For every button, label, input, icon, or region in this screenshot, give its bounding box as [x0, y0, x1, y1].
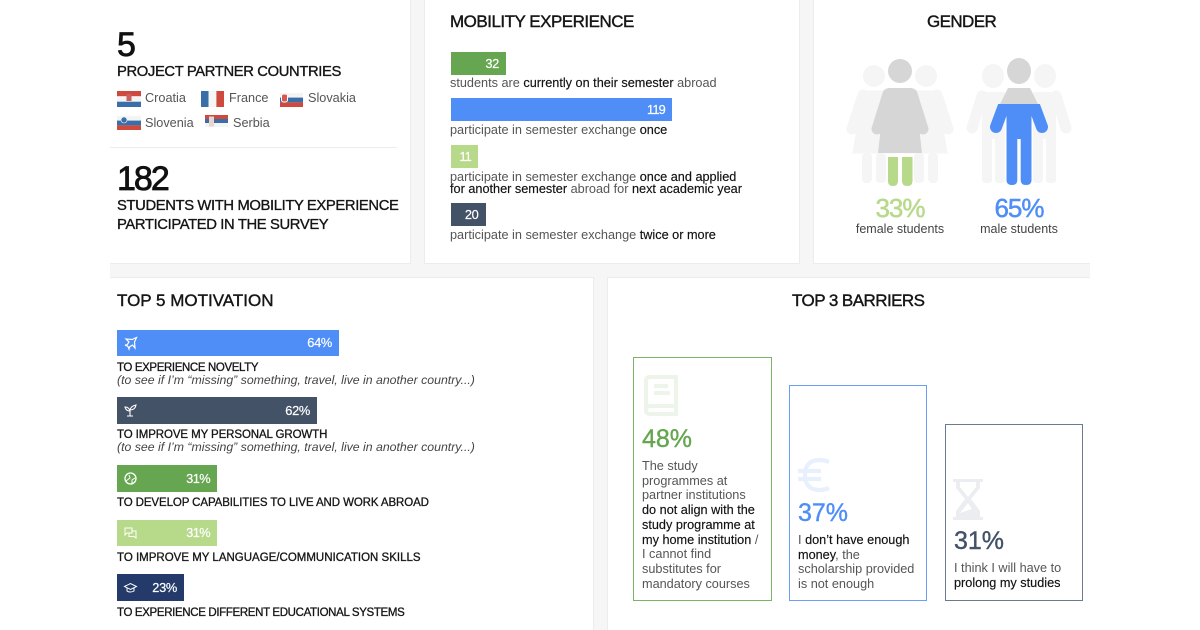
- stat: 37%: 37%: [798, 499, 848, 527]
- icon: book: [644, 375, 678, 416]
- heading: gender: GENDER: [927, 12, 996, 31]
- text: students with mobility experience: [117, 198, 399, 233]
- chart: gender figures: [846, 58, 1072, 233]
- bar: 31% language: [117, 520, 217, 546]
- text: study programmes: my home institution /: [642, 533, 758, 547]
- text: personal growth: TO IMPROVE MY PERSONAL GROWTH: [117, 429, 327, 441]
- text: money: I don’t have enough: [798, 533, 909, 547]
- text: study programmes: study programme at: [642, 518, 755, 532]
- text: prolong studies: I think I will have to: [954, 561, 1061, 575]
- text: study programmes: The study: [642, 459, 698, 473]
- bar: 20 students: 20: [465, 207, 478, 222]
- icon: sprout: [124, 404, 137, 416]
- stat: 31%: 31%: [954, 527, 1004, 555]
- stat: 48%: 48%: [642, 425, 692, 453]
- note: growth detail: (to see if I’m “missing” something, travel, live in another country...): [117, 440, 475, 454]
- icon: graduation cap: [124, 583, 138, 592]
- flag: Slovakia: [280, 93, 303, 107]
- text: prolong studies: prolong my studies: [954, 576, 1060, 590]
- text: education systems: TO EXPERIENCE DIFFERENT EDUCATIONAL SYSTEMS: [117, 607, 404, 619]
- label: Croatia: Croatia: [145, 91, 186, 105]
- bar: 11 students: [450, 145, 478, 168]
- figure: female centre: [877, 59, 923, 186]
- text: capabilities: TO DEVELOP CAPABILITIES TO LIVE AND WORK ABROAD: [117, 497, 429, 509]
- text: study programmes: programmes at: [642, 474, 727, 488]
- caption: female students: female students: [856, 222, 944, 236]
- bar: 23% education systems: 23%: [152, 580, 177, 595]
- bar: 31% capabilities: [117, 465, 217, 492]
- bar: 64% novelty: 64%: [307, 335, 332, 350]
- label: France: France: [229, 91, 268, 105]
- bar: 62% personal growth: [117, 397, 317, 424]
- text: students with mobility experience: STUDENTS WITH MOBILITY EXPERIENCE: [117, 198, 399, 214]
- heading: mobility experience: MOBILITY EXPERIENCE: [450, 12, 634, 31]
- heading: top 3 barriers: TOP 3 BARRIERS: [792, 291, 924, 310]
- heading: project partner countries: PROJECT PARTNER COUNTRIES: [117, 64, 341, 80]
- number: 5 partner countries: 5: [117, 26, 134, 64]
- bar: 119 students: [450, 98, 672, 121]
- figure: male centre blue: [996, 90, 1042, 185]
- flag: Croatia: [117, 91, 141, 107]
- card: barrier 31%: [945, 424, 1083, 601]
- card: barrier 37%: [789, 385, 927, 601]
- caption: once and applied: for another semester abroad for next academic year: [450, 182, 742, 196]
- caption: currently abroad: students are currently on their semester abroad: [450, 76, 717, 90]
- card: barrier 48%: [633, 357, 772, 601]
- icon: hourglass: [953, 479, 983, 520]
- label: Serbia: Serbia: [233, 116, 270, 130]
- figures: male group: [972, 58, 1066, 185]
- flag: Slovenia: [117, 116, 141, 130]
- text: study programmes: I cannot find: [642, 547, 711, 561]
- bar: 20 students: [450, 203, 486, 226]
- panel: top 3 barriers: [607, 277, 1090, 630]
- panel: top 5 motivation: [110, 277, 594, 630]
- bar: 32 students: 32: [485, 56, 499, 71]
- bar: 31% language: 31%: [186, 525, 210, 540]
- caption: once and applied: participate in semester exchange once and applied: [450, 170, 736, 184]
- text: money: scholarship provided: [798, 562, 914, 576]
- bar: 64% novelty: [117, 330, 339, 356]
- text: language: TO IMPROVE MY LANGUAGE/COMMUNICATION SKILLS: [117, 552, 421, 564]
- icon: euro: [798, 458, 830, 492]
- text: money: money, the: [798, 548, 860, 562]
- text: money: is not enough: [798, 577, 874, 591]
- bar: 11 students: 11: [459, 149, 471, 164]
- bar: 62% personal growth: 62%: [285, 403, 310, 418]
- caption: once and applied: [450, 170, 742, 196]
- panel: mobility experience: [424, 0, 800, 264]
- text: students with mobility experience: PARTICIPATED IN THE SURVEY: [117, 217, 328, 233]
- stat: 65% male: 65%: [994, 193, 1044, 223]
- icon: plane: [124, 336, 138, 351]
- caption: twice or more: participate in semester exchange twice or more: [450, 228, 716, 242]
- bar: 32 students: [450, 52, 506, 75]
- number: 182 students: 182: [117, 160, 168, 198]
- text: money: [798, 533, 914, 591]
- stat: 33% female: 33%: [875, 193, 925, 223]
- figure: male centre grey: [1000, 58, 1038, 104]
- bar: 119 students: 119: [647, 102, 665, 117]
- text: study programmes: mandatory courses: [642, 577, 750, 591]
- label: Slovenia: Slovenia: [145, 116, 194, 130]
- text: study programmes: partner institutions: [642, 488, 746, 502]
- figures: female group: [852, 59, 948, 186]
- panel: partner countries and respondents: [110, 0, 411, 264]
- panel: gender: [813, 0, 1090, 264]
- note: novelty detail: (to see if I’m “missing” something, travel, live in another country...): [117, 373, 475, 387]
- text: study programmes: do not align with the: [642, 503, 755, 517]
- caption: once: participate in semester exchange once: [450, 123, 667, 137]
- heading: top 5 motivation: TOP 5 MOTIVATION: [117, 291, 274, 310]
- text: study programmes: substitutes for: [642, 562, 721, 576]
- bar: 31% capabilities: 31%: [186, 471, 210, 486]
- bar: 23% education systems: [117, 574, 184, 601]
- text: study programmes: [642, 459, 758, 591]
- icon: globe: [124, 472, 137, 485]
- flag: France: [201, 91, 224, 107]
- caption: male students: male students: [980, 222, 1058, 236]
- icon: speech bubbles: [124, 528, 136, 539]
- label: Slovakia: Slovakia: [308, 91, 356, 105]
- text: prolong studies: [954, 561, 1061, 590]
- flag: Serbia: [205, 115, 228, 127]
- text: experience novelty: TO EXPERIENCE NOVELTY: [117, 362, 258, 374]
